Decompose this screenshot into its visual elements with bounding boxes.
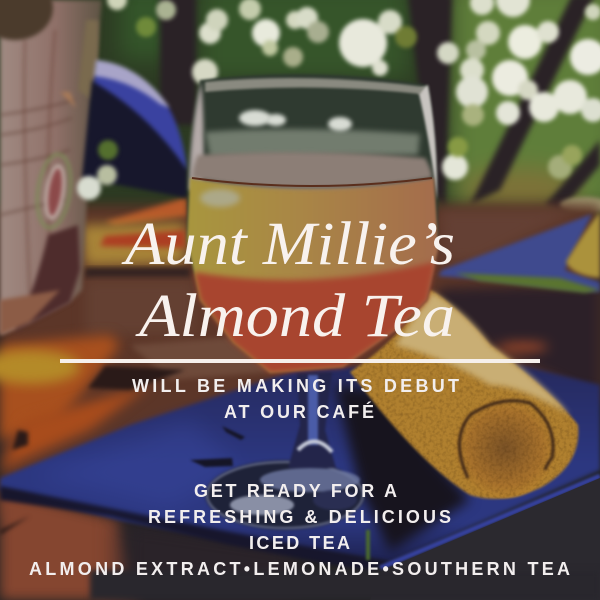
rolled towel [349, 289, 580, 500]
bottom dark band [90, 570, 600, 600]
liquid surface [192, 152, 432, 189]
announcement text [132, 376, 459, 422]
title: Aunt Millie’s [121, 211, 455, 278]
plate shadow to the right of the glass [335, 385, 470, 552]
bokeh lights [107, 0, 600, 213]
tea description text: ICED TEA [249, 533, 350, 553]
red lower liquid [194, 262, 435, 373]
title [121, 211, 455, 350]
ice highlight [200, 189, 240, 207]
bokeh lights below chair [77, 140, 118, 200]
plate dark marks [190, 426, 245, 467]
wooden table [0, 197, 600, 600]
dark tree trunks [160, 0, 600, 212]
bottom right dark corner [370, 478, 600, 600]
foliage backdrop [0, 0, 600, 220]
upper-right blue plate and pear [438, 212, 600, 293]
tea description text: GET READY FOR A [194, 481, 397, 501]
jug [0, 0, 102, 335]
towel light top [395, 292, 570, 415]
plate underside [0, 486, 390, 572]
liquid [187, 178, 438, 373]
large blue plate [0, 365, 600, 572]
announcement text: AT OUR CAFÉ [224, 401, 374, 422]
towel texture [353, 327, 578, 498]
table shadows [0, 366, 185, 535]
tea description text [29, 481, 570, 579]
jug pattern [0, 0, 98, 335]
tea description text: REFRESHING & DELICIOUS [148, 507, 451, 527]
dark right side [430, 284, 600, 400]
blue chair arc [82, 60, 187, 198]
wine glass [187, 74, 438, 560]
glass stem and base [205, 372, 368, 560]
glass bowl [187, 74, 438, 373]
divider line [60, 359, 540, 363]
blue plate [438, 214, 600, 292]
glass highlights [189, 78, 437, 200]
tea description text: ALMOND EXTRACT•LEMONADE•SOUTHERN TEA [29, 559, 570, 579]
plate front rim [380, 476, 600, 568]
title: Almond Tea [135, 283, 455, 350]
plate highlight [30, 420, 240, 510]
pear [566, 212, 600, 278]
announcement text: WILL BE MAKING ITS DEBUT [132, 376, 459, 396]
